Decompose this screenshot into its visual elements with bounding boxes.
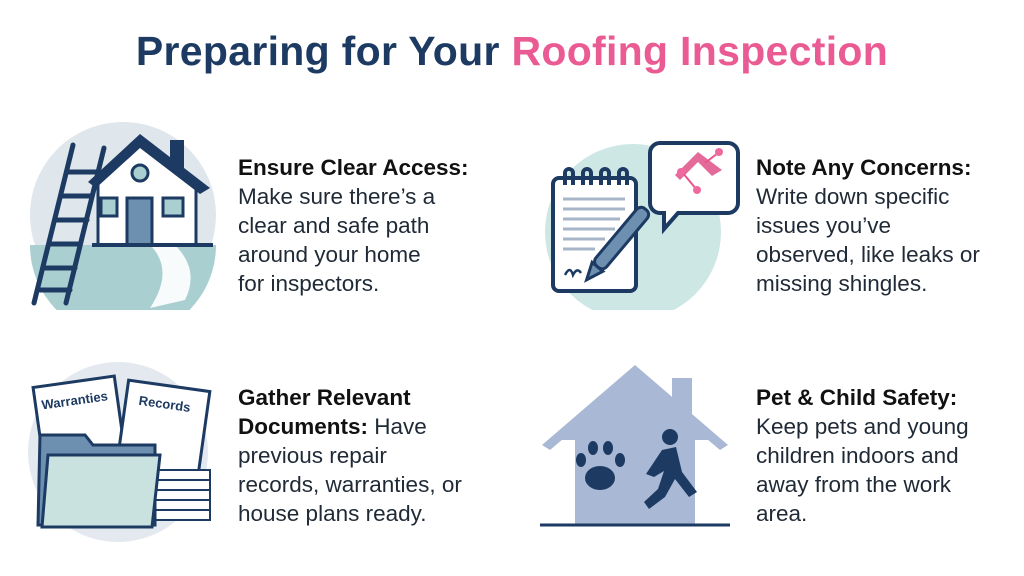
- text: note any concerns: issues you’ve: [756, 213, 891, 238]
- text: gather documents: previous repair: [238, 443, 387, 468]
- text: ensure clear access: [238, 155, 469, 296]
- text: pet and child safety: Pet & Child Safety:: [756, 385, 957, 410]
- text: gather documents: Documents: Have: [238, 414, 427, 439]
- text: note any concerns: observed, like leaks or: [756, 242, 980, 267]
- text: ensure clear access: for inspectors.: [238, 271, 379, 296]
- text: ensure clear access: Make sure there’s a: [238, 184, 435, 209]
- text: ensure clear access: Ensure Clear Access:: [238, 155, 469, 180]
- text: pet and child safety: away from the work: [756, 472, 951, 497]
- text: note any concerns: Note Any Concerns:: [756, 155, 971, 180]
- text: pet and child safety: Keep pets and young: [756, 414, 969, 439]
- text: note any concerns: [756, 155, 980, 296]
- text: gather documents: [238, 385, 462, 526]
- text: gather documents: records, warranties, or: [238, 472, 462, 497]
- icon: documents and folder: [28, 362, 212, 542]
- text: gather documents: Gather Relevant: [238, 385, 411, 410]
- icon: documents and folder: Records: [138, 393, 192, 415]
- text: note any concerns: missing shingles.: [756, 271, 927, 296]
- text: note any concerns: Write down specific: [756, 184, 949, 209]
- text: ensure clear access: around your home: [238, 242, 421, 267]
- text: ensure clear access: clear and safe path: [238, 213, 429, 238]
- text: pet and child safety: area.: [756, 501, 807, 526]
- icon: house with pet and child: [540, 365, 730, 526]
- title: Preparing for Your Roofing Inspection: [136, 28, 888, 74]
- text: pet and child safety: children indoors and: [756, 443, 959, 468]
- text: pet and child safety: [756, 385, 969, 526]
- icon: documents and folder: Warranties: [41, 388, 109, 412]
- text: gather documents: house plans ready.: [238, 501, 426, 526]
- icon: notepad and pen: [545, 141, 740, 310]
- icon: house with ladder: [30, 122, 216, 310]
